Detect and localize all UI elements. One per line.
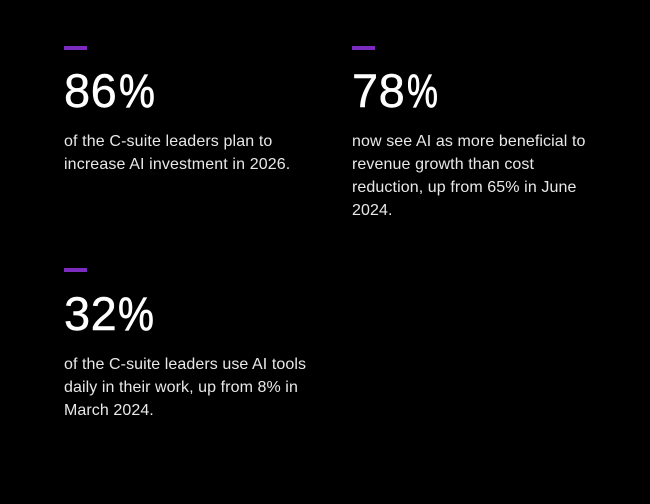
text block: 78% description: reduction, up from 65% in June [352,179,576,196]
panel: 86% stat [64,46,290,173]
heading: 32%: % [118,287,155,340]
text block: 32% description [64,356,306,419]
text block: 78% description [352,133,586,219]
heading: 32% [64,287,155,340]
heading: 86%: 86 [64,64,117,117]
heading: 78%: 78 [352,64,405,117]
text block: 78% description: revenue growth than cost [352,156,534,173]
panel: 78% stat [352,46,586,219]
text block: 32% description: March 2024. [64,402,154,419]
heading: 78%: % [407,64,439,117]
text block: 86% description: increase AI investment in 2026. [64,156,290,173]
accent bar [64,268,87,272]
text block: 32% description: daily in their work, up from 8% in [64,379,298,396]
text block: 78% description: 2024. [352,202,393,219]
text block: 32% description: of the C-suite leaders use AI tools [64,356,306,373]
heading: 32%: 32 [64,287,117,340]
accent bar [352,46,375,50]
heading: 86% [64,64,156,117]
heading: 78% [352,64,439,117]
heading: 86%: % [119,64,156,117]
text block: 86% description: of the C-suite leaders plan to [64,133,272,150]
text block: 86% description [64,133,290,173]
text block: 78% description: now see AI as more beneficial to [352,133,586,150]
accent bar [64,46,87,50]
panel: 32% stat [64,268,306,419]
